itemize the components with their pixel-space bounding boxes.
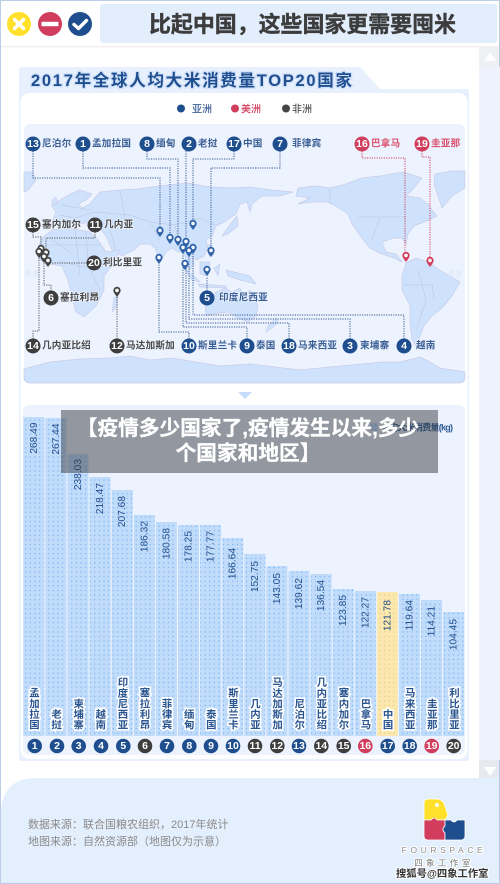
overlay headline banner: 个国家和地区】 [176,441,320,465]
scrollbar [479,47,500,781]
country labels on map: 17 [228,138,240,150]
footer panel [1,778,499,883]
title box: 比起中国，这些国家更需要囤米 [149,12,456,37]
country labels on map: 9 [244,340,250,352]
overlay headline banner [61,410,438,473]
rank badges: 12 [271,740,283,752]
bar values [29,422,460,650]
country labels on map: 利比里亚 [103,256,142,268]
country labels on map: 印度尼西亚 [219,292,268,304]
bar values: 268.49 [29,422,40,454]
rank badges: 6 [142,740,148,752]
world map [24,124,465,383]
bar values: 121.78 [382,600,393,631]
chart legend: 人均大米消费量(kg) [381,422,453,432]
north america [296,172,437,262]
rank badges: 10 [227,740,239,752]
japan [222,216,238,236]
bar values: 166.64 [228,548,239,579]
rank badges: 20 [448,740,460,752]
bar country names: 巴拿马 [358,698,371,731]
icon: yellow cross [7,12,31,36]
bar values: 207.68 [117,496,128,527]
country labels on map: 老挝 [198,138,218,150]
british isles [52,197,57,205]
rank badges: 16 [359,740,371,752]
title box [100,4,497,43]
bar country names: 塞拉利昂 [138,687,150,731]
bar country names: 孟加拉国 [27,687,39,731]
map legend: 美洲 [241,102,261,116]
indonesia [184,262,256,288]
country labels on map: 19 [416,138,428,150]
bar values: 143.05 [272,573,283,604]
country labels on map: 5 [204,292,210,304]
rank badges: 8 [186,740,192,752]
bar values: 177.77 [206,531,217,562]
rank badges: 5 [120,740,126,752]
country labels on map: 1 [80,138,86,150]
icon: blue check [68,12,92,36]
country labels on map: 14 [27,340,39,352]
map legend: 非洲 [292,102,312,116]
country labels on map: 尼泊尔 [42,138,72,150]
rank badges: 2 [54,740,60,752]
country labels on map: 16 [356,138,368,150]
australia [205,288,258,322]
panel heading: 2017年全球人均大米消费量TOP20国家 [31,70,352,90]
country labels on map: 巴拿马 [371,138,400,150]
source notes: 地图来源：自然资源部（地图仅为示意） [28,834,226,848]
country labels on map: 18 [283,340,295,352]
country labels on map: 柬埔寨 [360,340,390,352]
panel: bar chart [23,405,465,755]
country labels on map: 马来西亚 [298,340,337,352]
header bar [1,4,499,48]
bar country names [27,677,459,731]
bar country names: 越南 [93,708,106,731]
country borders [50,188,434,330]
rank badges: 15 [338,740,350,752]
rank badges: 11 [249,740,261,752]
country labels on map: 8 [144,138,150,150]
bar country names: 塞内加尔 [336,687,349,730]
bar country names: 几内亚比绍 [314,677,326,731]
country labels on map: 圭亚那 [431,138,461,150]
map legend [177,102,312,116]
watermark: 搜狐号@四象工作室 [396,867,488,880]
bar country names: 尼泊尔 [292,698,304,730]
country labels on map: 塞拉利昂 [60,292,99,304]
new zealand [266,318,278,332]
country labels on map: 泰国 [256,340,276,352]
map legend: 亚洲 [192,104,212,116]
bar country names: 泰国 [204,708,216,731]
country labels on map: 几内亚 [104,218,134,230]
rank badges: 1 [32,740,38,752]
rank badges [27,739,461,753]
country labels on map: 中国 [243,138,263,150]
equator labels: 赤道 [448,269,462,278]
bar values: 136.54 [316,580,327,611]
country labels on map: 2 [186,138,192,150]
bar values: 152.75 [250,561,261,592]
country labels on map: 20 [88,257,100,269]
bar values: 218.47 [95,483,106,514]
bar values: 139.62 [294,578,305,609]
country labels on map: 7 [277,138,283,150]
source notes: 数据来源：联合国粮农组织，2017年统计 [28,817,228,831]
country labels on map: 塞内加尔 [42,218,81,230]
bar values: 186.32 [139,521,150,552]
bar values: 180.58 [161,528,172,559]
country labels on map: 菲律宾 [292,138,322,150]
country labels on map: 孟加拉国 [92,138,131,150]
greenland [24,171,465,208]
bar country names: 柬埔寨 [71,697,83,731]
bar country names: 中国 [381,708,393,731]
rank badges: 17 [382,740,394,752]
rank badges: 14 [315,740,327,752]
bar country names: 圭亚那 [425,697,437,731]
country labels on map: 11 [89,219,101,231]
logo wordmark: FOURSPACE [402,845,486,855]
africa [37,228,120,317]
bar country names: 利比里亚 [447,687,459,730]
bar values: 104.45 [449,619,460,650]
overlay headline banner: 【疫情多少国家了,疫情发生以来,多少 [77,416,419,440]
country labels on map: 13 [27,138,39,150]
country labels on map: 斯里兰卡 [198,340,237,352]
antarctica [24,356,465,383]
south america [402,258,460,346]
country labels on map: 6 [48,292,54,304]
rank badges: 13 [293,740,305,752]
bar values: 267.44 [51,423,62,455]
madagascar [112,295,118,312]
rank badges: 3 [76,740,82,752]
logo [424,799,465,840]
country labels on map: 4 [401,340,407,352]
bar country names: 斯里兰卡 [226,687,238,731]
country labels on map: 3 [347,340,353,352]
country labels on map: 几内亚比绍 [42,340,91,352]
equator labels: 赤道 [25,269,39,278]
bar values: 114.21 [427,606,438,636]
country labels on map: 10 [183,340,195,352]
bar country names: 菲律宾 [160,697,172,731]
country labels on map: 12 [111,340,123,352]
country labels on map: 缅甸 [156,138,176,150]
bar values: 123.85 [338,595,349,626]
bar values: 119.64 [404,600,416,630]
rank badges: 18 [404,740,416,752]
bar country names: 马来西亚 [403,688,415,730]
country labels on map: 马达加斯加 [126,340,175,352]
landmasses [24,171,465,383]
eurasia [52,183,293,270]
country labels on map: 15 [27,219,39,231]
bar country names: 几内亚 [248,698,260,730]
bar country names: 印度尼西亚 [115,677,128,730]
equator labels [25,269,462,278]
rank badges: 19 [426,740,438,752]
leader lines [33,151,430,339]
bar country names: 缅甸 [182,708,194,731]
philippines [207,244,214,256]
country labels on map: 越南 [416,340,436,352]
country labels on map [26,136,461,354]
bar values: 122.27 [360,597,371,628]
bar country names: 马达加斯加 [270,677,282,731]
bar country names: 老挝 [49,708,61,731]
bar values: 178.25 [184,531,194,562]
source notes [28,817,228,848]
map pins [35,220,434,297]
logo chinese name: 四象工作室 [414,858,474,868]
panel: main card [19,67,469,761]
rank badges: 7 [164,740,170,752]
rank badges: 9 [208,740,214,752]
arrow: map to chart [238,392,252,399]
rank badges: 4 [98,740,104,752]
bars [23,417,464,736]
icon: red minus [38,12,62,36]
bar values: 238.03 [73,459,84,490]
